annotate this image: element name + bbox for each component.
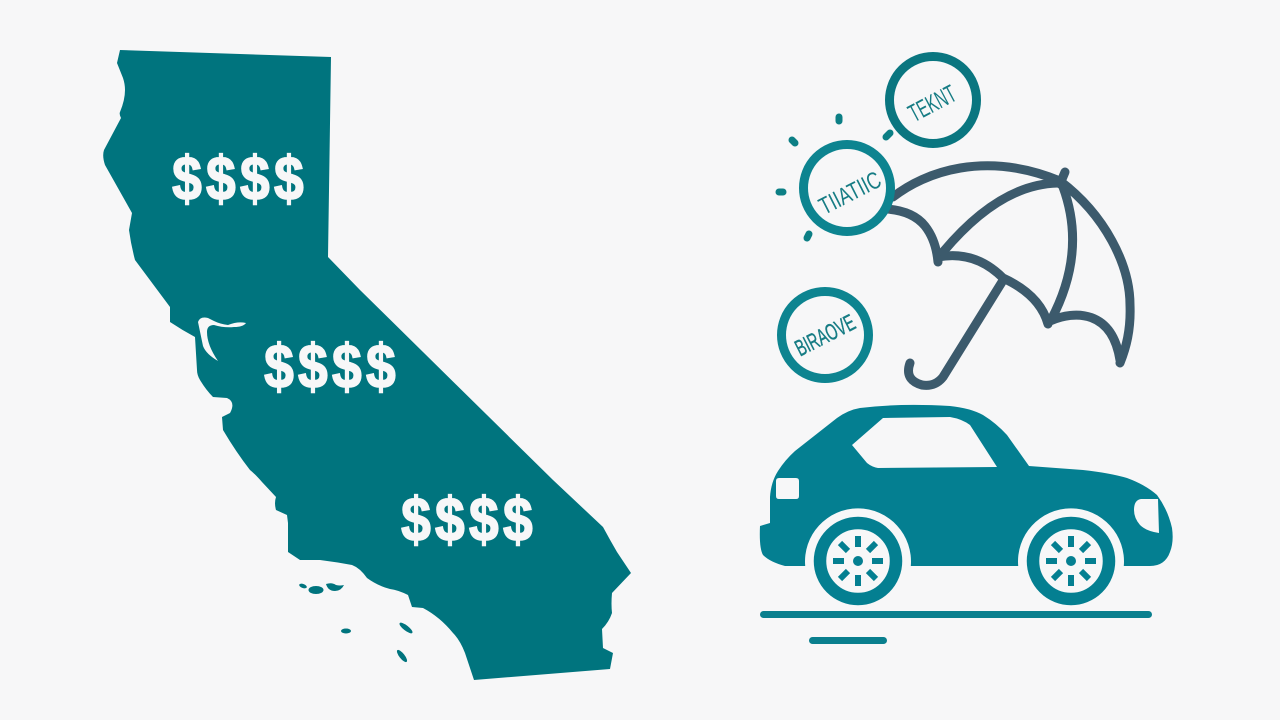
badge: middle circle xyxy=(804,144,890,232)
car body xyxy=(760,405,1173,566)
icon: car xyxy=(760,405,1173,599)
dollar signs: central: $$$$ xyxy=(264,333,400,402)
california map xyxy=(103,50,631,680)
badge: lower circle xyxy=(782,292,868,378)
rear wheel xyxy=(820,523,896,599)
channel islands xyxy=(299,583,414,664)
front wheel xyxy=(1033,523,1109,599)
icon: umbrella xyxy=(887,166,1130,385)
state silhouette xyxy=(103,50,631,680)
badge text: TEKNT xyxy=(904,80,961,128)
badge: top circle xyxy=(890,56,976,144)
badge text: BIRAOVE xyxy=(791,309,859,361)
badge text: TIIATIIC xyxy=(815,166,886,220)
dollar signs: north: $$$$ xyxy=(172,145,308,214)
dollar signs: south: $$$$ xyxy=(401,486,537,555)
san francisco bay xyxy=(198,318,246,361)
sparkle ticks xyxy=(779,117,890,238)
road lines xyxy=(760,611,1152,644)
